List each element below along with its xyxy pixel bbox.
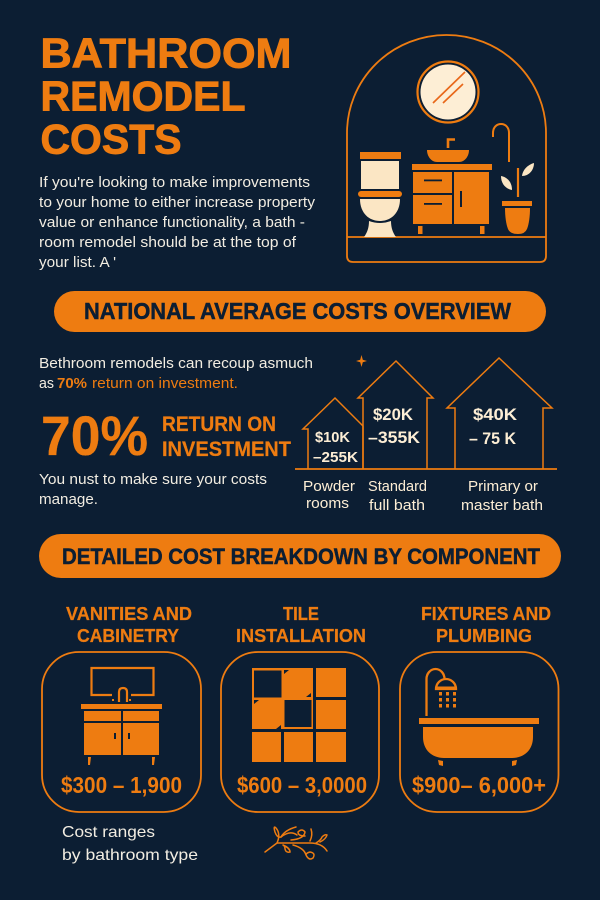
column heading: INSTALLATION <box>236 626 366 646</box>
house: standard full bath: –355K <box>368 429 420 447</box>
house: primary or master bath: – 75 K <box>469 429 517 448</box>
icon: vanity with sink <box>412 140 492 234</box>
manage note <box>39 471 267 508</box>
heading: detailed cost breakdown <box>39 534 561 578</box>
icon: sparkle <box>356 355 367 367</box>
recoup text: 70% <box>57 375 87 392</box>
column: fixtures and plumbing <box>400 604 558 812</box>
house: powder rooms: rooms <box>306 496 349 512</box>
caption <box>62 824 198 864</box>
stat: 70 percent: INVESTMENT <box>162 437 291 461</box>
column heading: FIXTURES AND <box>421 604 551 624</box>
manage note: You nust to make sure your costs <box>39 471 267 488</box>
caption: by bathroom type <box>62 847 198 864</box>
icon: potted plant <box>493 124 534 234</box>
recoup text <box>39 355 313 392</box>
column heading: VANITIES AND <box>66 604 192 624</box>
icon: shower and bathtub <box>419 669 539 766</box>
house: standard full bath: full bath <box>369 498 425 514</box>
house: standard full bath: $20K <box>373 406 413 424</box>
heading: national average costs overview <box>54 291 546 332</box>
house: standard full bath: Standard <box>368 479 427 495</box>
column heading <box>421 604 551 646</box>
column heading <box>236 604 366 646</box>
house: primary or master bath <box>447 358 552 514</box>
house: powder rooms: –255K <box>313 449 358 466</box>
house: powder rooms <box>303 398 363 512</box>
card frame <box>400 652 558 812</box>
icon: toilet <box>358 152 402 237</box>
heading: detailed cost breakdown: DETAILED COST BREAKDOWN BY COMPONENT <box>62 544 540 569</box>
recoup text: Bethroom remodels can recoup asmuch <box>39 355 313 372</box>
price: $300 – 1,900 <box>61 772 182 798</box>
recoup text: return on investment. <box>92 375 238 392</box>
house: primary or master bath: master bath <box>461 498 543 514</box>
column heading: TILE <box>283 604 319 624</box>
intro text: value or enhance functionality, a bath - <box>39 214 305 231</box>
column: vanities and cabinetry <box>42 604 201 812</box>
column: tile installation <box>221 604 379 812</box>
stat: 70 percent <box>41 404 291 467</box>
icon: tiles <box>252 668 346 762</box>
caption: Cost ranges <box>62 824 155 841</box>
card frame <box>221 652 379 812</box>
arch frame <box>347 35 546 262</box>
house: primary or master bath: Primary or <box>468 479 538 495</box>
heading: national average costs overview: NATIONAL AVERAGE COSTS OVERVIEW <box>84 298 512 324</box>
title <box>40 30 292 162</box>
card frame <box>42 652 201 812</box>
intro text: room remodel should be at the top of <box>39 234 297 251</box>
price: $600 – 3,0000 <box>237 772 367 798</box>
title: BATHROOM <box>40 30 292 76</box>
title: REMODEL <box>40 72 246 120</box>
icon: round mirror <box>418 62 478 122</box>
stat: 70 percent: 70% <box>41 404 148 467</box>
price: $900– 6,000+ <box>412 772 546 798</box>
intro text: to your home to either increase property <box>39 194 316 211</box>
icon: decorative sprig <box>265 827 327 859</box>
stat: 70 percent: RETURN ON <box>162 412 276 436</box>
title: COSTS <box>40 116 182 162</box>
intro text: If you're looking to make improvements <box>39 174 310 191</box>
illustration: bathroom arch <box>347 35 546 262</box>
house: powder rooms: $10K <box>315 429 350 446</box>
chart: house cost ranges <box>295 358 557 514</box>
intro text <box>39 174 316 271</box>
recoup text: as <box>39 375 54 392</box>
icon: vanity <box>81 668 162 765</box>
house: standard full bath <box>358 361 433 514</box>
manage note: manage. <box>39 491 98 508</box>
column heading: CABINETRY <box>77 626 179 646</box>
intro text: your list. A ' <box>39 254 116 271</box>
column heading <box>66 604 192 646</box>
column heading: PLUMBING <box>436 626 532 646</box>
house: primary or master bath: $40K <box>473 405 518 424</box>
house: powder rooms: Powder <box>303 479 355 495</box>
